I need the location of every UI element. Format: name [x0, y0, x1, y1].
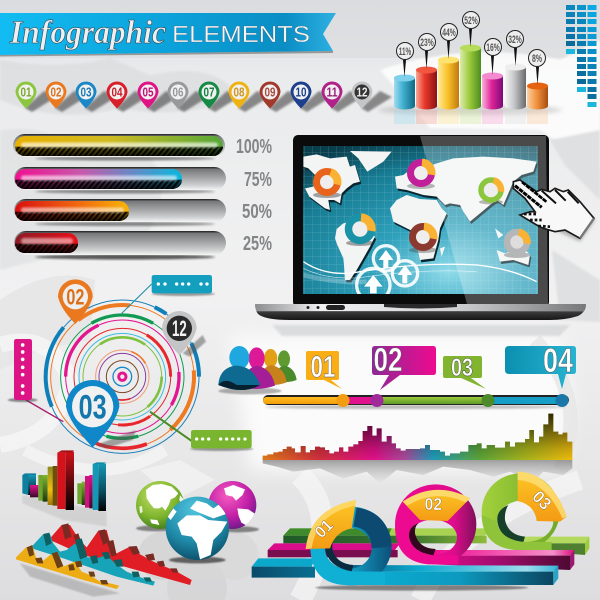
radial target chart — [8, 275, 253, 453]
pin 02: 02 — [66, 284, 84, 309]
green column back — [38, 475, 43, 501]
laptop screen — [303, 146, 538, 294]
stepped 3D ribbon charts — [16, 523, 192, 597]
pin 03: 03 — [79, 389, 107, 427]
globe reflections — [138, 532, 259, 600]
connector lines — [122, 284, 152, 313]
globe blue — [166, 497, 229, 563]
cylinder 11%: 11% — [399, 46, 411, 58]
progress bar 100% — [13, 134, 272, 160]
yellow column back — [48, 467, 53, 505]
cylinder 44% — [438, 24, 459, 110]
laptop — [255, 135, 595, 336]
cylinder 32% — [505, 30, 526, 110]
numbered pin row: 09 — [264, 84, 276, 100]
callout 01: 01 — [310, 349, 336, 384]
person blue — [218, 346, 260, 390]
callout 02 — [372, 341, 436, 390]
world map on screen — [303, 151, 538, 282]
green ribbon — [283, 473, 589, 555]
blue block equalizer — [566, 5, 596, 107]
pin 02 — [58, 279, 93, 324]
globe green — [136, 481, 184, 531]
yellow ribbon — [16, 545, 119, 589]
person orange — [260, 349, 287, 385]
people icon — [218, 346, 297, 394]
label 25%: 25% — [243, 233, 272, 255]
numbered pin row: 02 — [50, 84, 62, 100]
person magenta — [243, 347, 275, 389]
callout 03 — [443, 354, 486, 389]
title banner — [0, 13, 336, 56]
teal ribbon — [32, 533, 155, 586]
label 100%: 100% — [236, 136, 272, 158]
callout 02: 02 — [374, 341, 402, 378]
callout green — [190, 430, 253, 451]
cylinder 16%: 16% — [486, 42, 500, 54]
laptop frame — [293, 135, 549, 307]
red column — [57, 453, 66, 509]
hand cursor — [513, 180, 595, 242]
numbered pin row — [16, 82, 392, 112]
shine wedge — [420, 136, 548, 304]
orange tab 01: 01 — [311, 516, 337, 542]
numbered pin row: 10 — [296, 84, 306, 100]
timeline — [263, 341, 576, 409]
numbered pin row: 12 — [356, 84, 368, 100]
green column front — [77, 483, 82, 504]
label 50%: 50% — [242, 201, 272, 223]
laptop base — [255, 304, 586, 320]
callout 04: 04 — [543, 342, 573, 380]
callout 03: 03 — [451, 354, 473, 382]
callout pink — [8, 339, 38, 402]
cylinder 8% — [527, 50, 548, 110]
3D ring ribbons — [252, 472, 589, 591]
histogram — [263, 414, 572, 483]
pin 12: 12 — [172, 316, 187, 341]
teal column back — [22, 473, 36, 495]
teal column front — [93, 464, 98, 510]
orange tab 02 — [403, 490, 470, 521]
numbered pin row: 08 — [234, 84, 244, 100]
globe magenta — [208, 481, 259, 532]
numbered pin row: 01 — [20, 84, 32, 100]
pin 12 — [162, 311, 206, 357]
blue ribbon — [252, 507, 558, 585]
cylinder bar chart — [378, 12, 562, 124]
orange tab 02: 02 — [425, 494, 442, 514]
orange tab 03: 03 — [528, 486, 556, 514]
cylinder 23% — [416, 34, 437, 110]
cylinder 32%: 32% — [508, 34, 522, 46]
magenta ribbon — [268, 484, 574, 570]
numbered pin row: 07 — [204, 84, 214, 100]
orange tab 03 — [518, 472, 567, 522]
screen swoosh and arrows — [303, 244, 537, 294]
cylinder 11% — [394, 42, 415, 110]
screen donut 1 — [313, 172, 341, 198]
3D column chart — [22, 450, 107, 527]
numbered pin row: 03 — [80, 84, 92, 100]
cylinder 52%: 52% — [464, 15, 478, 27]
screen donut 4 — [346, 218, 374, 246]
magenta column back — [30, 485, 38, 497]
red ribbon — [50, 523, 192, 585]
progress bar 50% — [14, 199, 272, 226]
screen donut 3 — [479, 180, 503, 204]
orange tab 01 — [306, 500, 356, 549]
title: Infographic: Infographic — [9, 15, 166, 51]
numbered pin row: 06 — [172, 84, 184, 100]
person green — [275, 350, 297, 382]
callout teal — [152, 275, 215, 296]
progress bar 25% — [14, 231, 272, 260]
pin 03 — [66, 380, 136, 448]
numbered pin row: 11 — [326, 84, 338, 100]
callout 04 — [505, 342, 576, 389]
label 75%: 75% — [244, 169, 272, 191]
cylinder 8%: 8% — [532, 53, 542, 65]
screen donut 2 — [407, 162, 435, 189]
cylinder 23%: 23% — [420, 37, 434, 49]
numbered pin row: 04 — [112, 84, 123, 100]
screen donut 5 — [409, 226, 437, 253]
cylinder 52% — [460, 12, 481, 110]
globes — [136, 481, 259, 563]
progress bar 75% — [14, 167, 272, 194]
cylinder 44%: 44% — [442, 27, 456, 39]
screen donut 6 — [504, 232, 530, 258]
title: ELEMENTS: ELEMENTS — [172, 21, 310, 47]
magenta column front — [85, 476, 90, 508]
numbered pin row: 05 — [142, 84, 154, 100]
cylinder 16% — [482, 38, 503, 110]
